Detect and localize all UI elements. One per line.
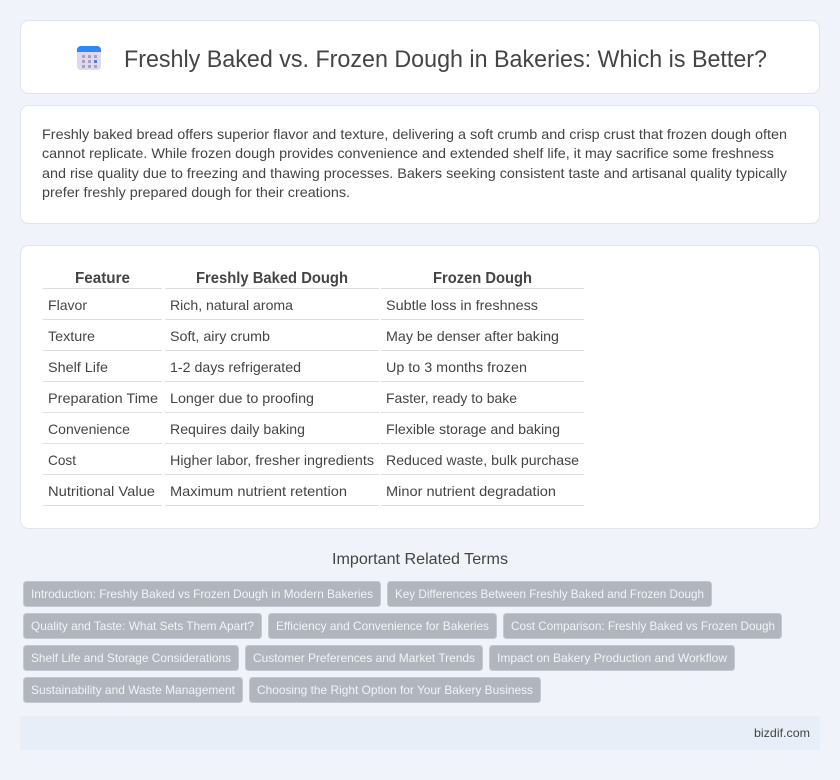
row: cost: Reduced waste, bulk purchase [386, 452, 579, 468]
table header [43, 270, 584, 289]
heading: related terms: Important Related Terms [332, 551, 508, 568]
row: convenience: Convenience [48, 421, 130, 437]
tag: Customer Preferences and Market Trends [253, 651, 475, 665]
tag [24, 646, 238, 670]
tag [24, 678, 242, 702]
panel: introduction [20, 106, 820, 224]
row: cost [43, 452, 584, 475]
row: nutritional value: Minor nutrient degradation [386, 483, 556, 499]
tag [268, 614, 496, 638]
row: preparation time: Preparation Time [48, 390, 158, 406]
tag [24, 582, 380, 606]
row: texture: Texture [48, 328, 95, 344]
tag [388, 582, 712, 606]
table header: Frozen Dough [433, 270, 532, 287]
panel: comparison table [20, 246, 820, 528]
tag [504, 614, 782, 638]
row: flavor: Subtle loss in freshness [386, 297, 538, 313]
intro text: Freshly baked bread offers superior flavor and texture, delivering a soft crumb and crisp crust that frozen dough often [42, 126, 787, 142]
intro text: cannot replicate. While frozen dough provides convenience and extended shelf life, it may sacrifice some freshness [42, 145, 774, 161]
row: shelf life [43, 359, 584, 382]
row: texture: Soft, airy crumb [170, 328, 270, 344]
panel: title header [20, 20, 820, 94]
panel: related term tags [24, 582, 782, 702]
row: shelf life: Shelf Life [48, 359, 108, 375]
tag [246, 646, 482, 670]
tag [490, 646, 734, 670]
tag: Impact on Bakery Production and Workflow [497, 651, 727, 665]
row: flavor [43, 297, 584, 320]
tag: Introduction: Freshly Baked vs Frozen Dough in Modern Bakeries [31, 587, 373, 601]
row: texture: May be denser after baking [386, 328, 559, 344]
tag [24, 614, 262, 638]
row: convenience: Requires daily baking [170, 421, 305, 437]
tag: Cost Comparison: Freshly Baked vs Frozen Dough [511, 619, 775, 633]
intro text: prefer freshly prepared dough for their creations. [42, 184, 350, 200]
tag: Efficiency and Convenience for Bakeries [276, 619, 489, 633]
row: preparation time: Longer due to proofing [170, 390, 314, 406]
row: nutritional value [43, 483, 584, 506]
row: flavor: Rich, natural aroma [170, 297, 293, 313]
intro text [42, 126, 787, 200]
row: preparation time [43, 390, 584, 413]
row: cost: Cost [48, 452, 76, 468]
tag [250, 678, 540, 702]
tag: Shelf Life and Storage Considerations [31, 651, 231, 665]
row: preparation time: Faster, ready to bake [386, 390, 517, 406]
row: convenience [43, 421, 584, 444]
table header: Freshly Baked Dough [196, 270, 348, 287]
tag: Quality and Taste: What Sets Them Apart? [31, 619, 254, 633]
tag: Sustainability and Waste Management [31, 683, 236, 697]
table header: Feature [75, 270, 130, 287]
row: shelf life: Up to 3 months frozen [386, 359, 527, 375]
footer bar [20, 716, 820, 750]
icon: calendar [77, 46, 101, 70]
row: nutritional value: Nutritional Value [48, 483, 155, 499]
row: cost: Higher labor, fresher ingredients [170, 452, 374, 468]
footer bar: bizdif.com [754, 726, 810, 740]
row: texture [43, 328, 584, 351]
intro text: and rise quality due to freezing and thawing processes. Bakers seeking consistent taste and artisanal quality typically [42, 165, 787, 181]
title: Freshly Baked vs. Frozen Dough in Bakeries: Which is Better? [124, 46, 767, 73]
row: nutritional value: Maximum nutrient retention [170, 483, 347, 499]
tag: Choosing the Right Option for Your Bakery Business [257, 683, 533, 697]
row: shelf life: 1-2 days refrigerated [170, 359, 301, 375]
row: convenience: Flexible storage and baking [386, 421, 560, 437]
row: flavor: Flavor [48, 297, 87, 313]
tag: Key Differences Between Freshly Baked and Frozen Dough [395, 587, 704, 601]
